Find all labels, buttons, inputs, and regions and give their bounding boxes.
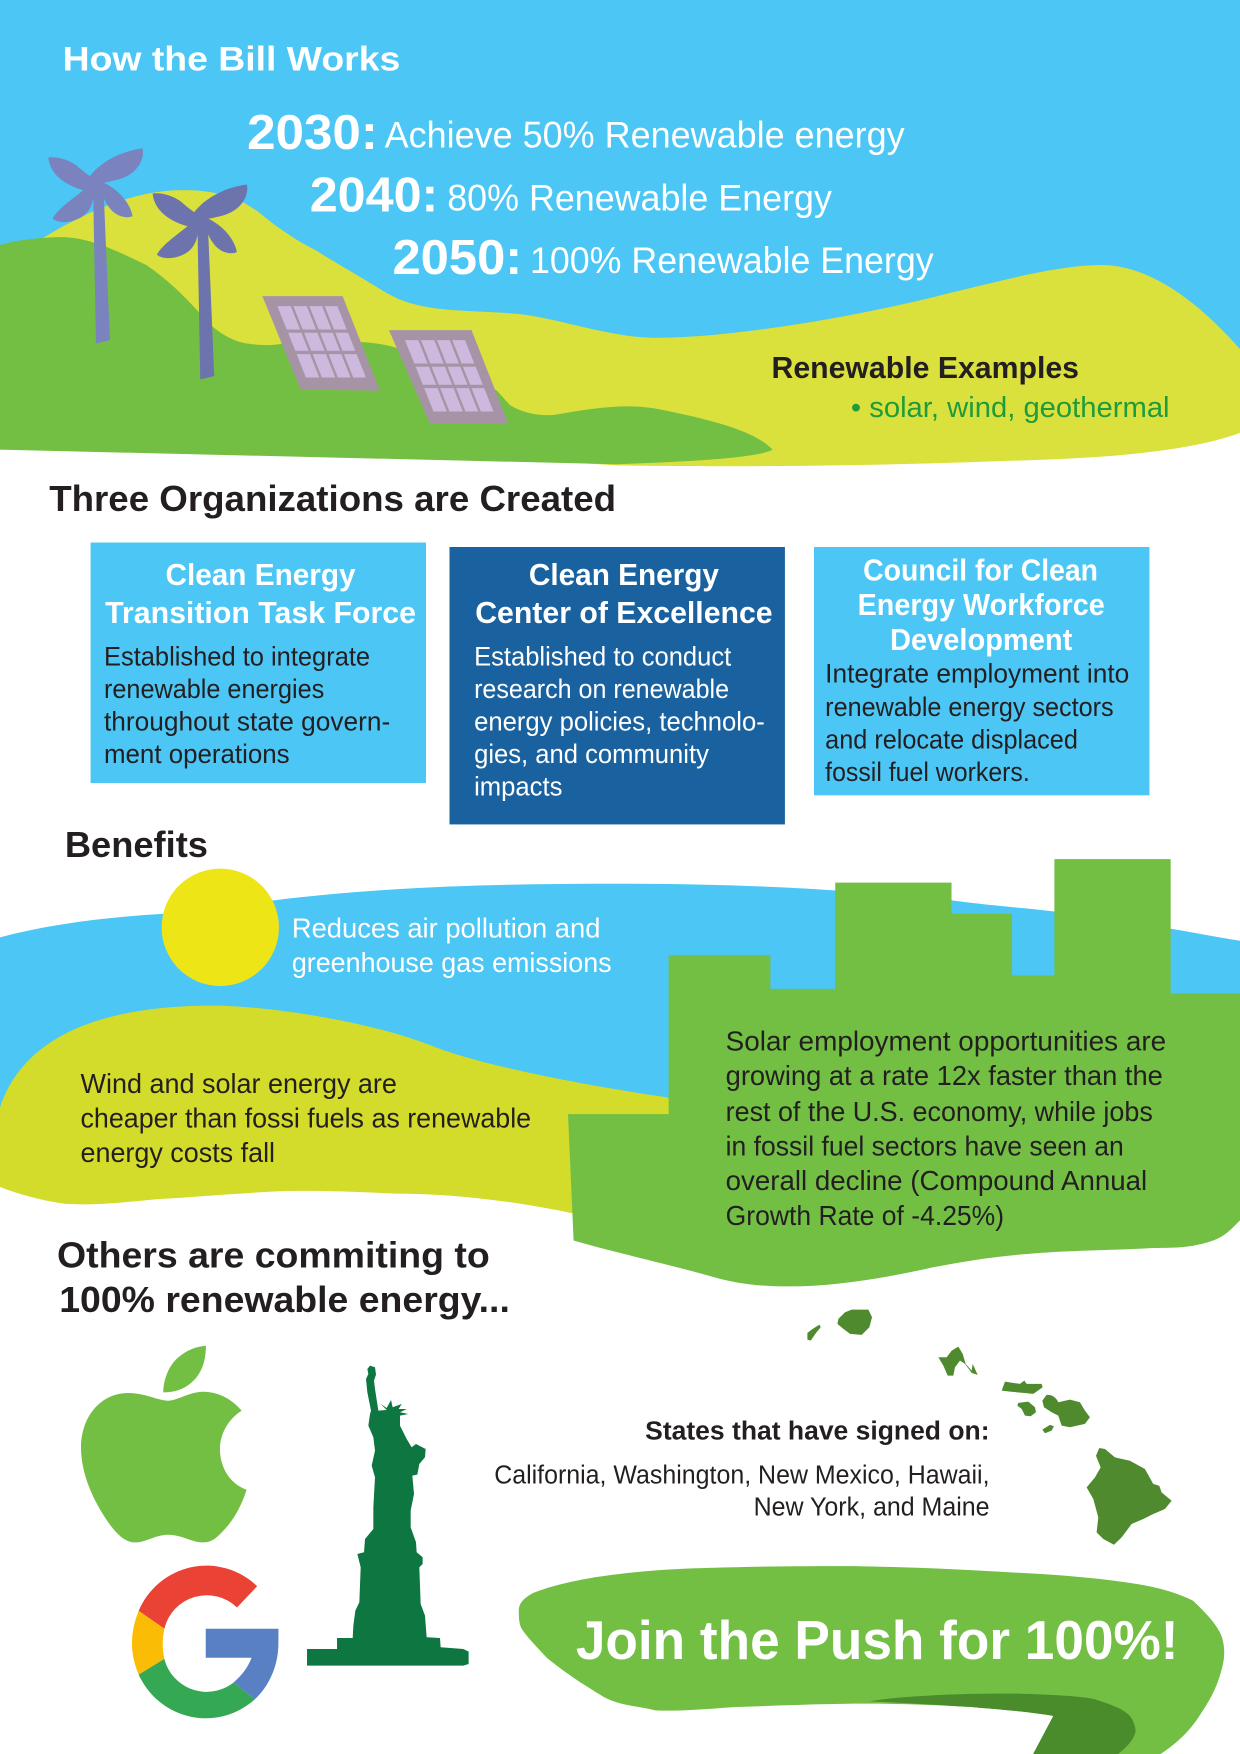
text: solar employment: Growth Rate of -4.25%) <box>726 1200 1004 1231</box>
timeline: 2050 <box>392 230 934 285</box>
green skyline <box>568 859 1240 1286</box>
timeline: 2040: 80% Renewable Energy <box>447 177 832 218</box>
heading: three organizations: Three Organizations are Created <box>49 479 616 519</box>
icon: hawaii islands <box>807 1310 1172 1545</box>
timeline: 2040 <box>310 167 832 222</box>
blue band <box>0 884 1240 1119</box>
timeline: 2050: 2050: <box>392 230 522 285</box>
text: states signed on <box>494 1418 990 1522</box>
bubble tail <box>870 1694 1136 1754</box>
text: air pollution: greenhouse gas emissions <box>292 947 612 978</box>
text: solar employment: overall decline (Compound Annual <box>726 1165 1147 1196</box>
panel: clean energy center of excellence: Established to conduct <box>474 642 732 672</box>
panel: clean energy center of excellence <box>449 547 785 824</box>
text: renewable examples: Renewable Examples <box>772 352 1079 385</box>
panel: clean energy center of excellence: Center of Excellence <box>475 597 773 630</box>
icon: wind turbine 2 <box>153 184 247 379</box>
heading: others are committing: Others are commiting to <box>57 1235 490 1275</box>
panel: clean energy center of excellence: impacts <box>474 771 562 801</box>
panel: clean energy transition task force: renewable energies <box>104 674 324 704</box>
heading: how the bill works: How the Bill Works <box>63 40 400 78</box>
text: states signed on: New York, and Maine <box>754 1494 990 1522</box>
text: air pollution: Reduces air pollution and <box>292 912 600 943</box>
panel: clean energy center of excellence: gies, and community <box>474 739 709 769</box>
timeline: 2030 <box>247 105 905 160</box>
panel: council for clean energy workforce development: renewable energy sectors <box>825 692 1114 722</box>
timeline: 2030: Achieve 50% Renewable energy <box>385 115 905 156</box>
green hill <box>0 237 773 464</box>
timeline: 2050: 100% Renewable Energy <box>530 240 934 281</box>
icon: google logo <box>132 1566 278 1718</box>
panel: council for clean energy workforce development: Integrate employment into <box>825 658 1129 688</box>
panel: clean energy center of excellence: research on renewable <box>474 674 729 704</box>
panel: council for clean energy workforce development: Development <box>890 624 1072 657</box>
timeline: 2030: 2030: <box>247 105 378 160</box>
panel: hero landscape <box>0 0 1240 466</box>
panel: council for clean energy workforce development: Council for Clean <box>863 555 1098 588</box>
panel: clean energy transition task force: ment operations <box>104 739 290 769</box>
icon: wind turbine 1 <box>48 148 143 343</box>
text: solar employment: Solar employment opportunities are <box>726 1025 1166 1056</box>
text: wind and solar cheaper: energy costs fall <box>81 1137 275 1168</box>
text: renewable examples <box>772 352 1170 424</box>
text: air pollution <box>292 912 612 978</box>
heading: benefits: Benefits <box>65 825 208 865</box>
text: solar employment <box>726 1025 1166 1231</box>
text: wind and solar cheaper <box>81 1068 531 1168</box>
text: wind and solar cheaper: cheaper than fossi fuels as renewable <box>81 1103 531 1134</box>
panel: clean energy transition task force: throughout state govern- <box>104 706 390 736</box>
text: states signed on: States that have signed on: <box>645 1418 990 1446</box>
icon: apple logo <box>81 1346 247 1542</box>
panel: council for clean energy workforce development: fossil fuel workers. <box>825 757 1030 787</box>
text: solar employment: in fossil fuel sectors have seen an <box>726 1131 1124 1162</box>
panel: clean energy transition task force <box>91 543 426 783</box>
heading: others are committing: 100% renewable energy... <box>59 1280 510 1320</box>
text: solar employment: growing at a rate 12x faster than the <box>726 1060 1163 1091</box>
yellow hill <box>42 190 1240 466</box>
yellow hill <box>0 1006 693 1230</box>
panel: clean energy center of excellence: Clean Energy <box>529 559 719 592</box>
panel: council for clean energy workforce development: Energy Workforce <box>858 589 1105 622</box>
callout: join the push <box>519 1566 1224 1754</box>
heading: others are committing <box>57 1235 510 1320</box>
panel: benefits landscape <box>0 859 1240 1286</box>
icon: solar panel 2 <box>389 330 509 424</box>
panel: clean energy transition task force: Established to integrate <box>104 642 370 672</box>
text: states signed on: California, Washington, New Mexico, Hawaii, <box>494 1461 990 1489</box>
text: wind and solar cheaper: Wind and solar energy are <box>81 1068 397 1099</box>
icon: solar panel 1 <box>262 296 380 391</box>
panel: clean energy transition task force: Transition Task Force <box>105 597 416 630</box>
panel: clean energy center of excellence: energy policies, technolo- <box>474 706 765 736</box>
speech bubble <box>519 1566 1224 1754</box>
icon: statue of liberty <box>307 1366 469 1666</box>
text: solar employment: rest of the U.S. economy, while jobs <box>726 1096 1153 1127</box>
panel: council for clean energy workforce development: and relocate displaced <box>825 724 1078 754</box>
icon: sun <box>162 869 279 986</box>
panel: council for clean energy workforce development <box>814 547 1149 795</box>
timeline: 2040: 2040: <box>310 167 438 222</box>
panel: clean energy transition task force: Clean Energy <box>165 559 356 592</box>
text: renewable examples: • solar, wind, geothermal <box>851 392 1170 424</box>
callout: join the push: Join the Push for 100%! <box>576 1609 1179 1671</box>
sky <box>0 0 1240 369</box>
